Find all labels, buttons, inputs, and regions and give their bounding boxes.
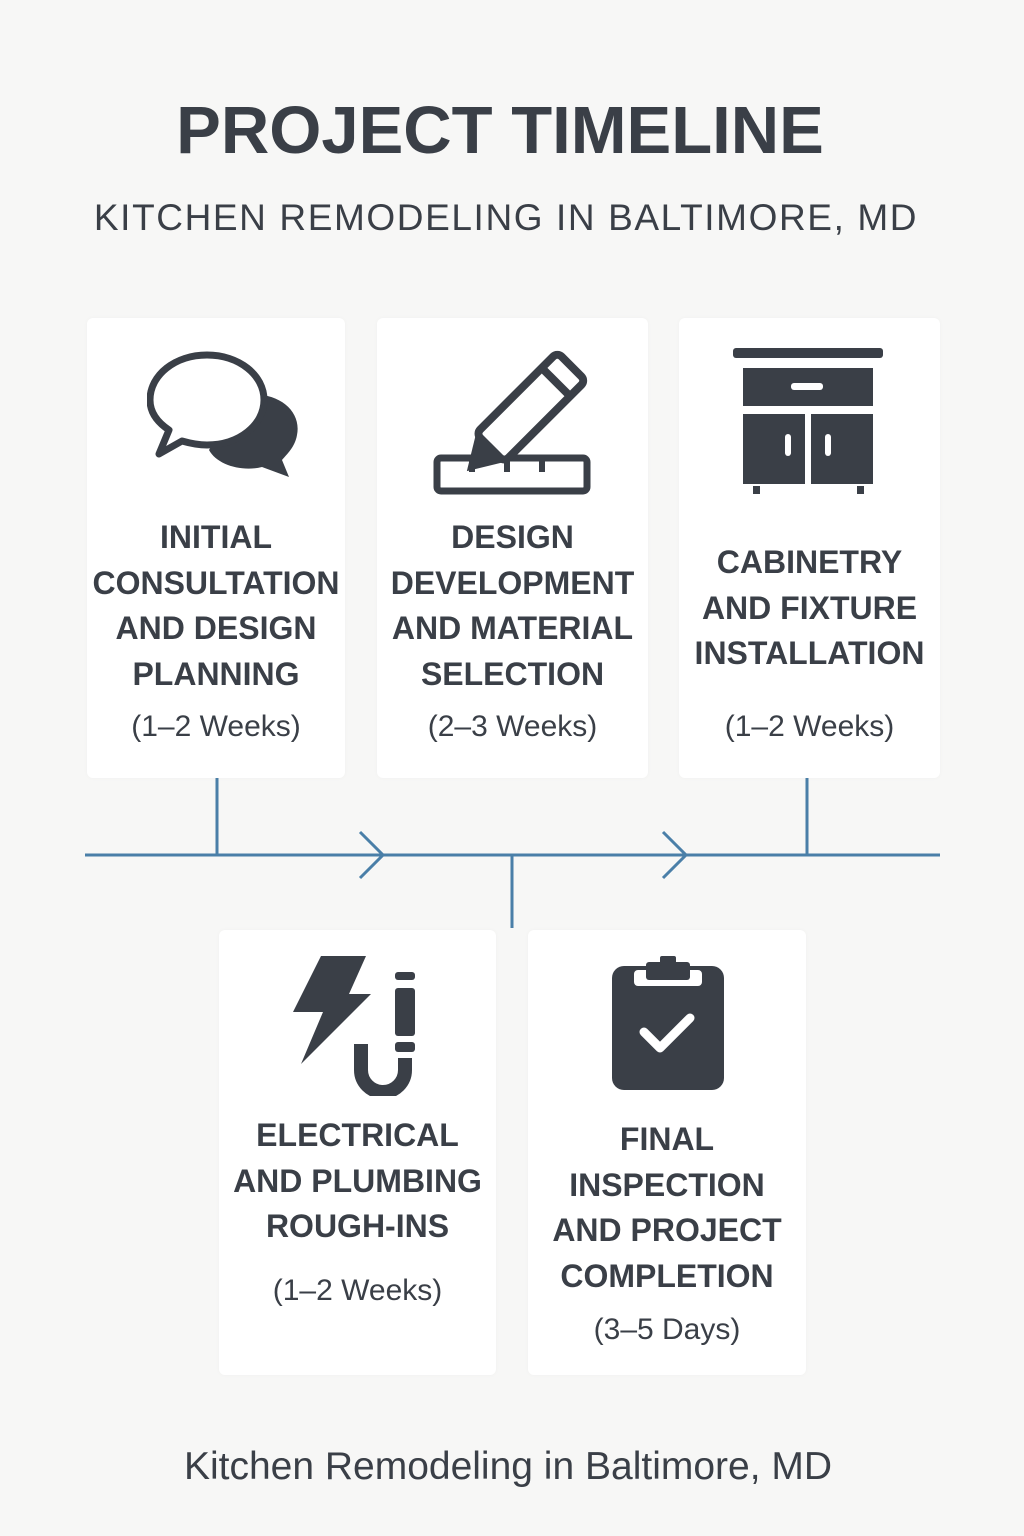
footer: Kitchen Remodeling in Baltimore, MD [184,1445,832,1488]
heading: AND MATERIAL [392,610,633,646]
icon: bolt and pipe [293,956,415,1096]
heading: INITIAL [160,519,272,555]
subtitle: KITCHEN REMODELING IN BALTIMORE, MD [94,197,918,238]
panel: electrical and plumbing [219,930,496,1375]
panel: cabinetry [679,318,940,778]
heading [552,1121,782,1294]
heading: INSTALLATION [695,635,924,671]
heading: PLANNING [132,656,300,692]
icon: clipboard check [612,956,724,1090]
heading: CABINETRY [717,544,902,580]
heading: ELECTRICAL [256,1117,459,1153]
heading: CONSULTATION [92,564,340,600]
heading: FINAL [620,1121,714,1157]
heading [391,519,634,692]
heading: AND DESIGN [116,610,316,646]
heading: COMPLETION [560,1258,774,1294]
duration: (1–2 Weeks) [273,1274,442,1307]
heading [233,1117,482,1244]
duration: (1–2 Weeks) [725,710,894,743]
heading [695,544,924,671]
heading [92,519,340,692]
panel: design development [377,318,648,778]
heading: DESIGN [451,519,574,555]
panel: initial consultation [87,318,345,778]
icon: pencil and ruler [434,350,590,494]
heading: ROUGH-INS [266,1208,449,1244]
timeline connector [85,778,940,928]
heading: AND PROJECT [552,1212,782,1248]
duration: (3–5 Days) [594,1313,740,1346]
icon: cabinet [733,348,883,494]
heading: INSPECTION [569,1166,765,1202]
heading: SELECTION [421,656,604,692]
title: PROJECT TIMELINE [176,93,824,168]
heading: AND FIXTURE [702,590,917,626]
panel: final inspection [528,930,806,1375]
duration: (2–3 Weeks) [428,710,597,743]
heading: DEVELOPMENT [391,564,634,600]
heading: AND PLUMBING [233,1162,482,1198]
duration: (1–2 Weeks) [131,710,301,743]
icon: chat bubbles [147,352,298,477]
